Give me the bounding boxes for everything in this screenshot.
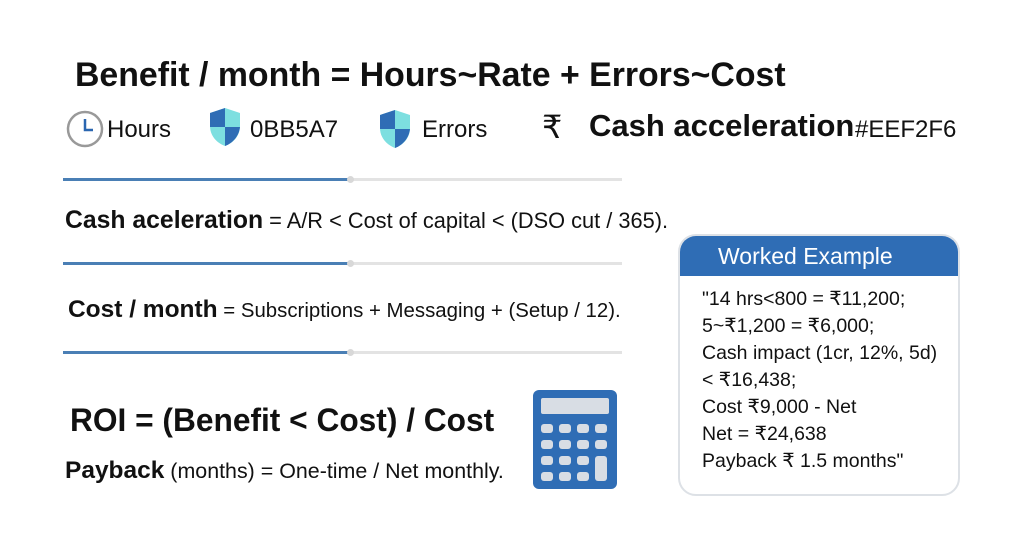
icon: shield 2 [380, 110, 410, 148]
icon: clock [66, 110, 104, 148]
formula: payback: Payback (months) = One-time / Net monthly. [65, 457, 504, 484]
legend text: 0BB5A7: 0BB5A7 [250, 116, 338, 143]
icon: rupee: ₹ [542, 109, 562, 145]
example text: 5~₹1,200 = ₹6,000; [702, 315, 874, 337]
example text: Cost ₹9,000 - Net [702, 396, 856, 418]
formula: cash acceleration: Cash aceleration = A/R < Cost of capital < (DSO cut / 365). [65, 206, 668, 234]
formula: ROI: ROI = (Benefit < Cost) / Cost [70, 402, 494, 438]
title: Benefit / month = Hours~Rate + Errors~Cost [75, 56, 786, 94]
icon: calculator [533, 390, 617, 489]
panel header [680, 236, 958, 276]
legend row: #EEF2F6 [855, 116, 956, 143]
panel header: Worked Example [718, 243, 893, 269]
example text: "14 hrs<800 = ₹11,200; [702, 288, 905, 310]
example text: Cash impact (1cr, 12%, 5d) [702, 342, 937, 364]
icon: shield 1 [210, 108, 240, 146]
legend text: Errors: Errors [422, 116, 487, 143]
panel: worked example [678, 234, 960, 496]
example text: Net = ₹24,638 [702, 423, 827, 445]
legend text: Cash acceleration: Cash acceleration [589, 108, 854, 143]
example text: Payback ₹ 1.5 months" [702, 450, 903, 472]
example text: < ₹16,438; [702, 369, 796, 391]
legend row [66, 108, 956, 148]
example text [702, 288, 937, 472]
legend text: Hours: Hours [107, 116, 171, 143]
formula: cost per month: Cost / month = Subscriptions + Messaging + (Setup / 12). [68, 296, 621, 323]
